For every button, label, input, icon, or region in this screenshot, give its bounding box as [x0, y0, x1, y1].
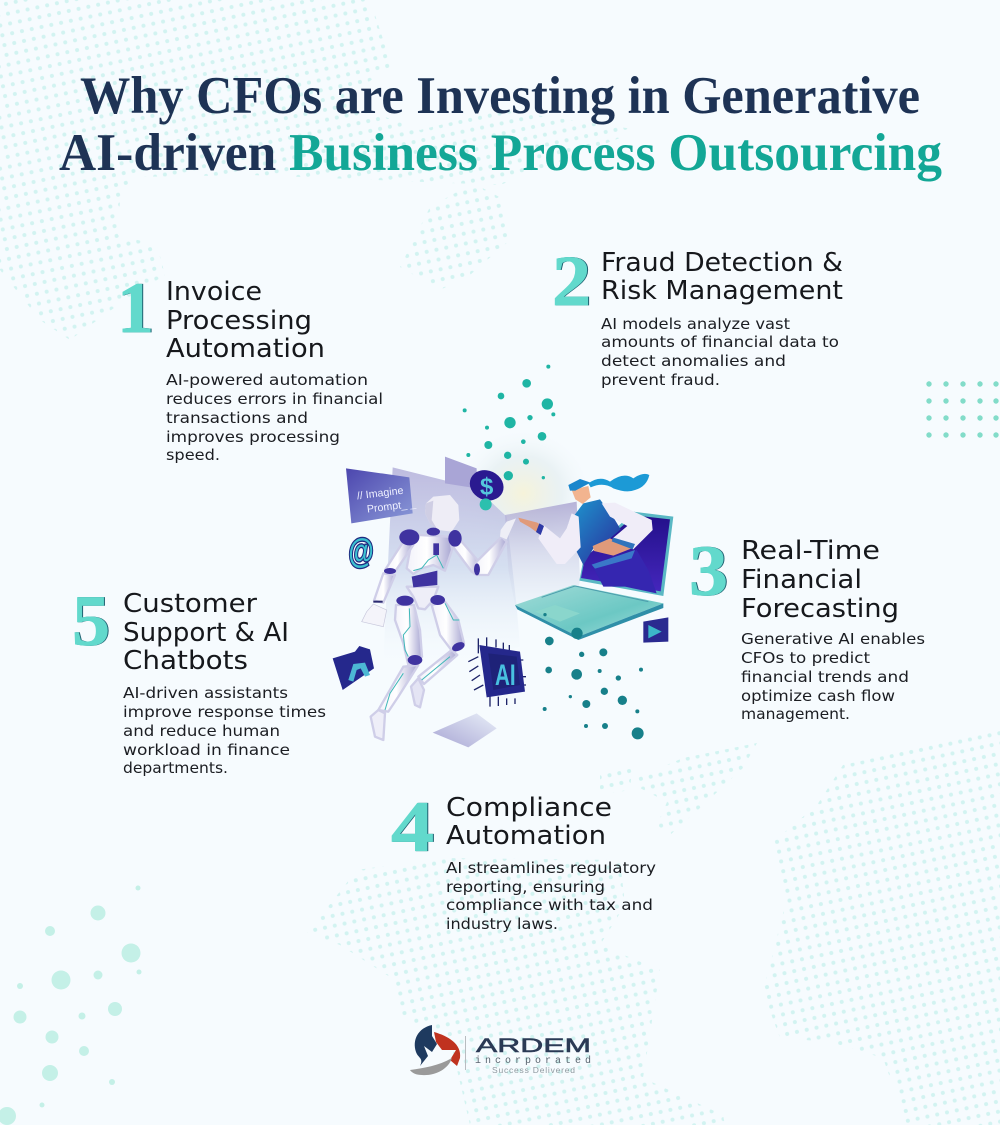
circuit lines — [385, 555, 459, 710]
torso — [407, 535, 452, 574]
item 5: customer support: Chatbots — [123, 646, 248, 676]
item 3: real-time forecasting: Real-Time — [741, 536, 880, 566]
item 5: customer support: AI-driven assistants — [123, 685, 288, 702]
translucent panel — [505, 502, 580, 617]
logo: ARDEM Incorporated — [410, 1025, 591, 1075]
item 3: real-time forecasting: financial trends and — [741, 669, 909, 686]
icon: dollar coin — [465, 465, 509, 510]
teal top dots — [463, 365, 555, 480]
item 5: customer support — [72, 581, 326, 777]
logo: ARDEM Incorporated: ARDEM — [476, 1036, 591, 1057]
glow — [453, 427, 593, 560]
icon: AI chip — [468, 637, 526, 707]
legs — [592, 550, 657, 593]
item 3: real-time forecasting — [689, 531, 925, 723]
right dot grid — [926, 381, 999, 438]
head — [572, 486, 591, 504]
item 4: compliance automation — [391, 787, 656, 933]
item 2: fraud detection: amounts of financial data to — [601, 334, 839, 351]
item 5: customer support: improve response times — [123, 704, 326, 721]
item 3: real-time forecasting: Forecasting — [741, 594, 899, 624]
item 4: compliance automation: Automation — [446, 821, 606, 851]
laptop and woman — [505, 474, 673, 640]
item 1: invoice processing automation: speed. — [166, 447, 220, 464]
item 1: invoice processing automation: Automation — [166, 334, 325, 364]
waist — [412, 571, 437, 587]
front leg — [395, 605, 422, 665]
item 1: invoice processing automation: AI-powered automation — [166, 372, 368, 389]
hair — [588, 474, 649, 491]
logo: ARDEM Incorporated: Success Delivered — [492, 1065, 575, 1075]
icon: AI chip: AI — [495, 659, 516, 692]
item 5: customer support: departments. — [123, 760, 228, 777]
floor tile — [433, 713, 497, 747]
item 5: customer support: Customer — [123, 589, 258, 619]
item 2: fraud detection: 2 — [552, 241, 591, 321]
logo: ARDEM Incorporated: incorporated — [475, 1055, 591, 1067]
item 1: invoice processing automation: reduces errors in financial — [166, 391, 383, 408]
item 3: real-time forecasting: CFOs to predict — [741, 650, 870, 667]
vest — [568, 499, 621, 565]
item 2: fraud detection: detect anomalies and — [601, 353, 786, 370]
item 1: invoice processing automation — [117, 268, 383, 464]
UI window: imagine prompt — [346, 457, 477, 523]
item 3: real-time forecasting: Generative AI enables — [741, 631, 925, 648]
item 1: invoice processing automation: improves processing — [166, 429, 340, 446]
item 1: invoice processing automation: Invoice — [166, 277, 262, 307]
right arm — [452, 542, 482, 575]
back leg — [432, 602, 464, 653]
pelvis — [407, 587, 438, 609]
item 2: fraud detection: AI models analyze vast — [601, 316, 790, 333]
icons and dots over scene — [333, 617, 668, 739]
UI window: imagine prompt: // Imagine — [356, 485, 404, 502]
translucent robot panel — [383, 467, 520, 667]
icon: play button — [643, 617, 668, 643]
left arm — [385, 542, 413, 572]
title — [59, 67, 942, 182]
logo mark — [410, 1025, 460, 1075]
item 1: invoice processing automation: Processing — [166, 306, 312, 336]
item 5: customer support: 5 — [72, 581, 110, 661]
dark teal bottom dots — [543, 637, 644, 739]
title: AI-driven Business Process Outsourcing — [59, 124, 942, 182]
pointing hand — [518, 518, 542, 533]
icon: dollar coin: $ — [480, 473, 493, 500]
UI window: imagine prompt: Prompt_ _ — [366, 498, 418, 516]
item 4: compliance automation: 4 — [391, 787, 434, 867]
hand on hip — [593, 538, 632, 556]
item 1: invoice processing automation: 1 — [117, 268, 154, 348]
item 3: real-time forecasting: optimize cash flow — [741, 688, 895, 705]
head — [425, 495, 459, 532]
shoulders — [399, 529, 419, 545]
item 4: compliance automation: industry laws. — [446, 916, 558, 933]
item 2: fraud detection: Fraud Detection & — [601, 248, 843, 278]
bottom-left bubbles — [0, 886, 142, 1125]
item 3: real-time forecasting: Financial — [741, 565, 862, 595]
robot — [362, 495, 516, 740]
item 2: fraud detection — [552, 241, 843, 389]
item 5: customer support: and reduce human — [123, 723, 280, 740]
backdrop, panels and icons — [346, 365, 593, 747]
icon: at sign: @ — [348, 533, 374, 571]
item 3: real-time forecasting: management. — [741, 706, 850, 723]
icon: folder — [333, 646, 374, 690]
item 4: compliance automation: AI streamlines regulatory — [446, 860, 656, 877]
woman — [518, 474, 657, 593]
item 5: customer support: workload in finance — [123, 742, 290, 759]
left sleeve — [538, 513, 581, 564]
item 3: real-time forecasting: 3 — [689, 531, 728, 611]
item 5: customer support: Support & AI — [123, 618, 289, 648]
item 4: compliance automation: Compliance — [446, 793, 612, 823]
central illustration: robot and woman in laptop — [333, 365, 673, 747]
title: Why CFOs are Investing in Generative — [80, 67, 920, 125]
item 4: compliance automation: compliance with tax and — [446, 897, 653, 914]
item 4: compliance automation: reporting, ensuring — [446, 879, 605, 896]
laptop — [515, 512, 673, 640]
item 1: invoice processing automation: transactions and — [166, 410, 308, 427]
right sleeve — [602, 503, 653, 549]
item 2: fraud detection: Risk Management — [601, 276, 843, 306]
item 2: fraud detection: prevent fraud. — [601, 372, 720, 389]
